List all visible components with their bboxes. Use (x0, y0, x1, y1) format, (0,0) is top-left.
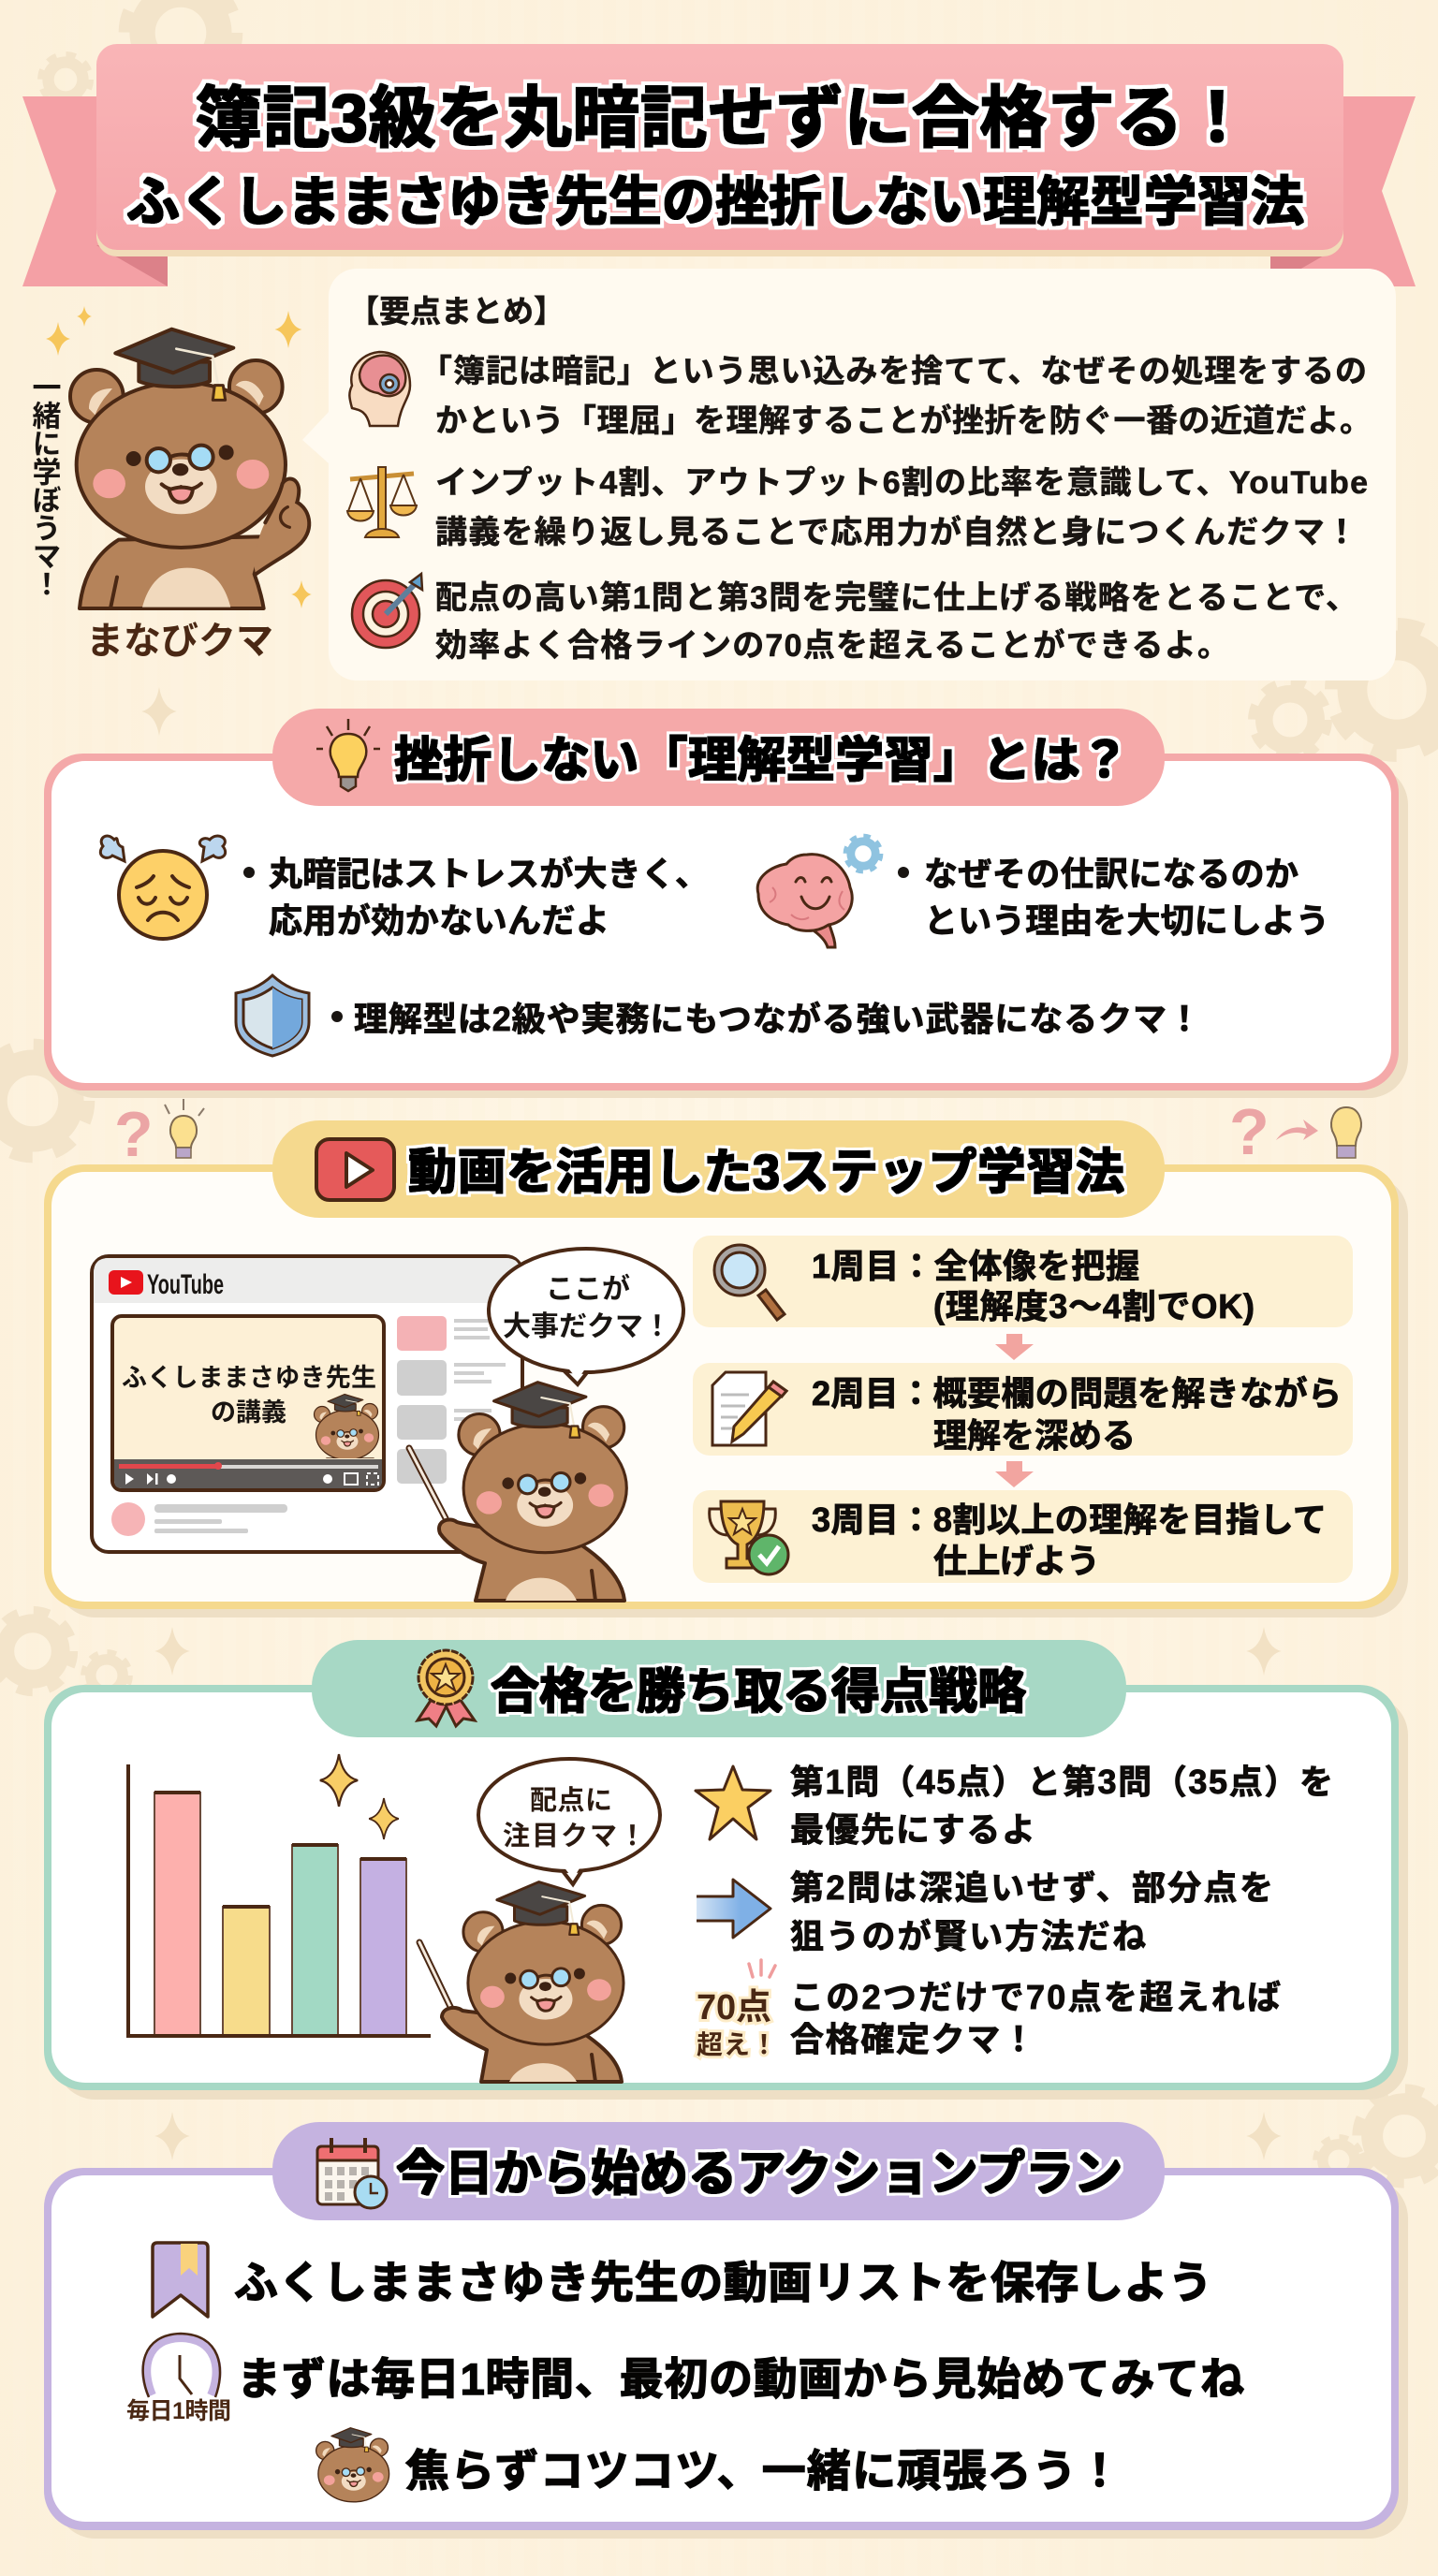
mascot: manabi bear (28, 306, 312, 662)
title line 2: ふくしままさゆき先生の挫折しない理解型学習法 (126, 172, 1304, 232)
panel: key points summary (302, 269, 1396, 681)
bullet 1: 丸暗記はストレスが大きく、 (269, 855, 709, 893)
decoration: question arrow bulb right: ? (1229, 1095, 1269, 1168)
decoration: question and bulb left: ? (114, 1099, 154, 1170)
video player: の講義 (211, 1398, 286, 1427)
panel: score strategy (44, 1640, 1408, 2100)
step 3: 仕上げよう (933, 1542, 1100, 1580)
section heading pill: 今日から始めるアクションプラン (396, 2147, 1123, 2202)
icon: shield (236, 975, 309, 1056)
decoration: question and bulb left (114, 1099, 204, 1170)
section heading pill (272, 709, 1165, 806)
bullet 2: という理由を大切にしよう (924, 901, 1329, 940)
icon: stressed face (100, 836, 226, 939)
strategy 3: 合格確定クマ！ (790, 2020, 1035, 2058)
action item 3 (316, 2428, 1122, 2502)
icon: smiling brain with gear (757, 836, 881, 947)
icon: play button (316, 1139, 394, 1200)
step 1 (693, 1236, 1353, 1327)
strategy 2: 第2問は深追いせず、部分点を (790, 1868, 1273, 1907)
summary point 2: インプット4割、アウトプット6割の比率を意識して、YouTube (435, 465, 1368, 501)
speech bubble: here is important: ここが (546, 1273, 630, 1305)
speech bubble: focus on points: 配点に (530, 1785, 612, 1816)
section heading pill (312, 1640, 1126, 1737)
bullet 1: 応用が効かないんだよ (269, 901, 609, 940)
sidebar thumbnails (397, 1316, 506, 1484)
summary heading: 【要点まとめ】 (348, 294, 565, 329)
badge: 70 points over (697, 1960, 777, 2059)
strategy 1: 第1問（45点）と第3問（35点）を (790, 1763, 1333, 1801)
mascot vertical speech: 一緒に学ぼうマ！ (28, 373, 61, 597)
sparkles around mascot (46, 306, 312, 608)
action item 1 (153, 2243, 1212, 2317)
mascot name: まなびクマ (86, 621, 273, 662)
bullet 3: 理解型は2級や実務にもつながる強い武器になるクマ！ (354, 1000, 1201, 1038)
step 1: (理解度3〜4割でOK) (933, 1287, 1255, 1325)
summary point 3 (435, 580, 1357, 664)
YouTube logo: YouTube (147, 1269, 224, 1300)
action item 3: 焦らずコツコツ、一緒に頑張ろう！ (405, 2446, 1122, 2496)
action item 2 (126, 2334, 1244, 2424)
ribbon: right tail (1270, 96, 1416, 286)
title line 1: 簿記3級を丸暗記せずに合格する！ (195, 81, 1251, 156)
bar chart (128, 1764, 431, 2036)
strategy 3: この2つだけで70点を超えれば (790, 1978, 1281, 2016)
ribbon: right fold (1270, 245, 1342, 286)
pointing bear with pointer stick (409, 1383, 626, 1601)
browser mockup (92, 1256, 522, 1552)
icon: bookmark (153, 2243, 208, 2317)
panel: action plan (44, 2122, 1408, 2539)
strategy 3 (697, 1960, 1281, 2059)
badge: 70 points over: 超え！ (697, 2030, 777, 2059)
summary point 2: 講義を繰り返し見ることで応用力が自然と身につくんだクマ！ (435, 514, 1357, 550)
summary point 3: 配点の高い第1問と第3問を完璧に仕上げる戦略をとることで、 (435, 580, 1357, 616)
strategy 2 (697, 1868, 1273, 1955)
icon: star (696, 1766, 770, 1839)
mini bear (313, 1393, 380, 1458)
arrow down 1 (995, 1334, 1034, 1360)
icon: head with brain and gear (349, 352, 410, 426)
speech bubble: here is important (489, 1249, 683, 1384)
decoration: question arrow bulb right (1229, 1095, 1361, 1168)
icon: clock (126, 2334, 231, 2424)
ribbon: left fold (96, 245, 168, 286)
icon: document and pencil (712, 1372, 786, 1445)
summary point 1: 「簿記は暗記」という思い込みを捨てて、なぜその処理をするの (420, 354, 1367, 389)
panel: three-step video study (44, 1120, 1408, 1617)
video player (112, 1316, 384, 1490)
summary point 2 (435, 465, 1368, 550)
icon: bear head (316, 2428, 389, 2502)
action item 1: ふくしままさゆき先生の動画リストを保存しよう (234, 2258, 1212, 2307)
badge: 70 points over: 70点 (697, 1988, 771, 2027)
summary point 1: かという「理屈」を理解することが挫折を防ぐ一番の近道だよ。 (435, 402, 1372, 439)
icon: calendar with clock (317, 2138, 387, 2208)
bullet 1 (243, 855, 709, 940)
arrow down 2 (995, 1461, 1034, 1487)
speech bubble: here is important: 大事だクマ！ (503, 1311, 671, 1342)
bullet 2 (898, 855, 1329, 940)
icon: magnifying glass (714, 1245, 785, 1320)
icon: right arrow (697, 1880, 770, 1938)
panel: understanding-based learning (44, 709, 1408, 1098)
strategy 1: 最優先にするよ (790, 1810, 1035, 1849)
section heading pill (272, 2122, 1165, 2220)
ribbon: left tail (22, 96, 168, 286)
step 1: 1周目：全体像を把握 (812, 1247, 1139, 1285)
bullet 2: なぜその仕訳になるのか (924, 855, 1299, 893)
speech bubble: focus on points (478, 1759, 660, 1884)
channel row (111, 1502, 287, 1536)
section heading pill: 合格を勝ち取る得点戦略 (491, 1665, 1026, 1720)
icon: light bulb (316, 719, 380, 791)
teaching bear (419, 1882, 624, 2082)
section heading pill (272, 1120, 1165, 1218)
section heading pill: 動画を活用した3ステップ学習法 (408, 1146, 1124, 1200)
icon: balance scale (347, 467, 417, 537)
step 3 (693, 1490, 1353, 1583)
step 2: 2周目：概要欄の問題を解きながら (812, 1374, 1342, 1412)
summary point 3: 効率よく合格ラインの70点を超えることができるよ。 (435, 627, 1229, 664)
strategy 2: 狙うのが賢い方法だね (790, 1917, 1146, 1955)
summary point 1 (420, 354, 1372, 439)
icon: medal (418, 1650, 475, 1726)
step 3: 3周目：8割以上の理解を目指して (812, 1500, 1327, 1539)
icon: target with arrow (352, 574, 422, 648)
icon: trophy with check (710, 1501, 788, 1574)
step 2: 理解を深める (933, 1416, 1136, 1455)
section heading pill: 挫折しない「理解型学習」とは？ (394, 734, 1129, 788)
speech bubble: focus on points: 注目クマ！ (503, 1821, 646, 1852)
sparkles above chart (320, 1754, 399, 1839)
icon: clock: 毎日1時間 (126, 2398, 231, 2424)
step 2 (693, 1363, 1353, 1456)
video player: ふくしままさゆき先生 (122, 1364, 376, 1392)
strategy 1 (696, 1763, 1333, 1849)
action item 2: まずは毎日1時間、最初の動画から見始めてみてね (237, 2354, 1244, 2404)
title banner (22, 44, 1416, 286)
YouTube logo (109, 1269, 224, 1300)
